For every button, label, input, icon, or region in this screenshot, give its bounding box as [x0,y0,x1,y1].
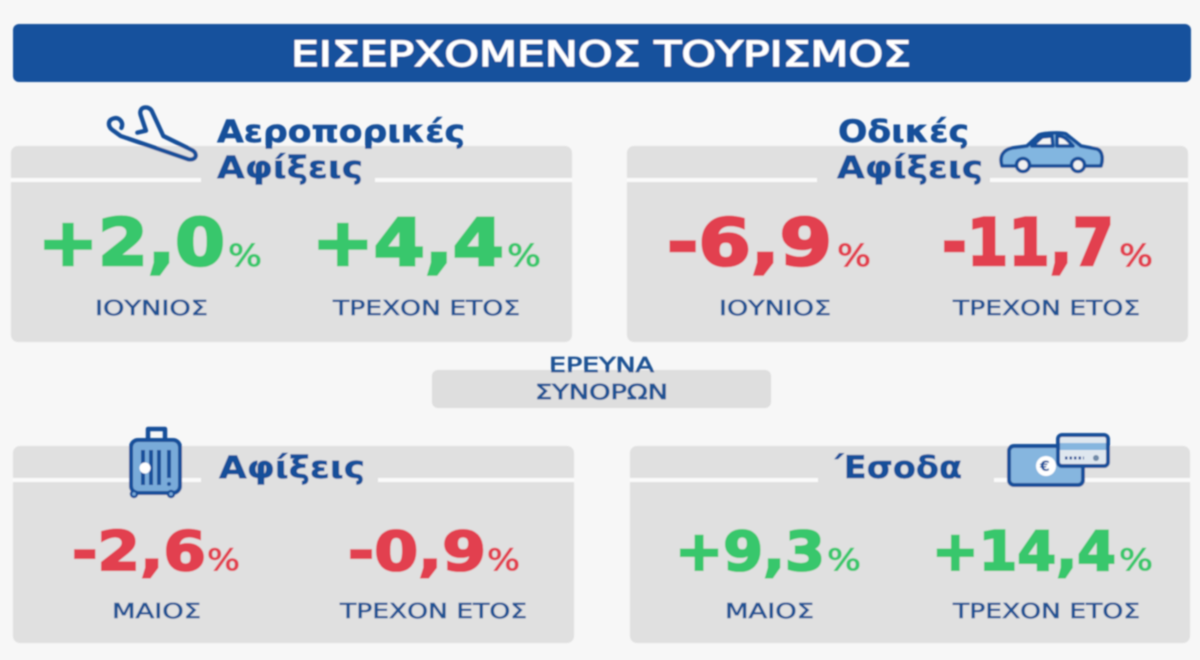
stat: June air +2,0% [38,206,262,320]
heading: arrivals: Αφίξεις [219,450,365,486]
stat: June air +2,0%: +2,0 [38,206,225,281]
stat: June air +2,0%: ΙΟΥΝΙΟΣ [95,296,208,320]
stat: year to date air +4,4% [312,206,541,320]
icon: cash and card [1009,435,1108,485]
heading: receipts: ΄Εσοδα [829,450,962,486]
stat: year to date receipts +14,4%: % [1119,543,1153,577]
border survey label: ΣΥΝΟΡΩΝ [535,380,668,404]
panel: receipts [630,435,1190,643]
icon: suitcase [131,429,180,497]
panel: road arrivals [627,114,1188,342]
stat: May arrivals -2,6%: % [207,543,240,577]
stat: May receipts +9,3%: ΜΑΙΟΣ [725,599,814,623]
stat: year to date arrivals -0,9% [339,520,527,623]
border survey label: ΕΡΕΥΝΑ [549,353,654,377]
panel: arrivals [13,429,574,643]
stat: year to date air +4,4%: % [507,239,541,274]
stat: year to date arrivals -0,9%: % [487,543,520,577]
panel: air arrivals [11,107,572,342]
stat: year to date road -11,7%: ΤΡΕΧΟΝ ΕΤΟΣ [952,296,1140,320]
stat: June road -6,9%: ΙΟΥΝΙΟΣ [719,296,831,320]
stat: May arrivals -2,6% [72,520,240,623]
panel: air arrivals: Αφίξεις [217,150,363,186]
stat: year to date receipts +14,4%: +14,4 [932,520,1116,583]
title banner [13,24,1191,82]
heading: air arrivals: Αεροπορικές [217,114,465,150]
icon: airplane [109,107,196,159]
stat: May arrivals -2,6%: ΜΑΙΟΣ [112,599,201,623]
icon: car [1001,133,1102,172]
icon: cash and card: € [1039,459,1050,475]
stat: May arrivals -2,6%: -2,6 [72,520,206,583]
stat: year to date arrivals -0,9%: ΤΡΕΧΟΝ ΕΤΟΣ [339,599,527,623]
stat: year to date road -11,7%: -11,7 [942,206,1114,281]
border survey label [432,353,771,408]
heading: road arrivals: Οδικές [838,114,969,150]
stat: June road -6,9%: % [837,239,871,274]
stat: year to date road -11,7% [942,206,1153,320]
stat: May receipts +9,3%: % [827,543,861,577]
stat: year to date air +4,4%: +4,4 [312,206,504,281]
stat: year to date road -11,7%: % [1119,239,1153,274]
stat: June road -6,9%: -6,9 [667,206,832,281]
stat: year to date receipts +14,4%: ΤΡΕΧΟΝ ΕΤΟΣ [952,599,1140,623]
panel: road arrivals: Αφίξεις [837,150,983,186]
stat: year to date air +4,4%: ΤΡΕΧΟΝ ΕΤΟΣ [332,296,520,320]
stat: June air +2,0%: % [228,239,262,274]
stat: May receipts +9,3% [675,520,861,623]
stat: year to date receipts +14,4% [932,520,1153,623]
stat: May receipts +9,3%: +9,3 [675,520,825,583]
title: ΕΙΣΕΡΧΟΜΕΝΟΣ ΤΟΥΡΙΣΜΟΣ [291,35,911,75]
stat: June road -6,9% [667,206,871,320]
stat: year to date arrivals -0,9%: -0,9 [348,520,486,583]
